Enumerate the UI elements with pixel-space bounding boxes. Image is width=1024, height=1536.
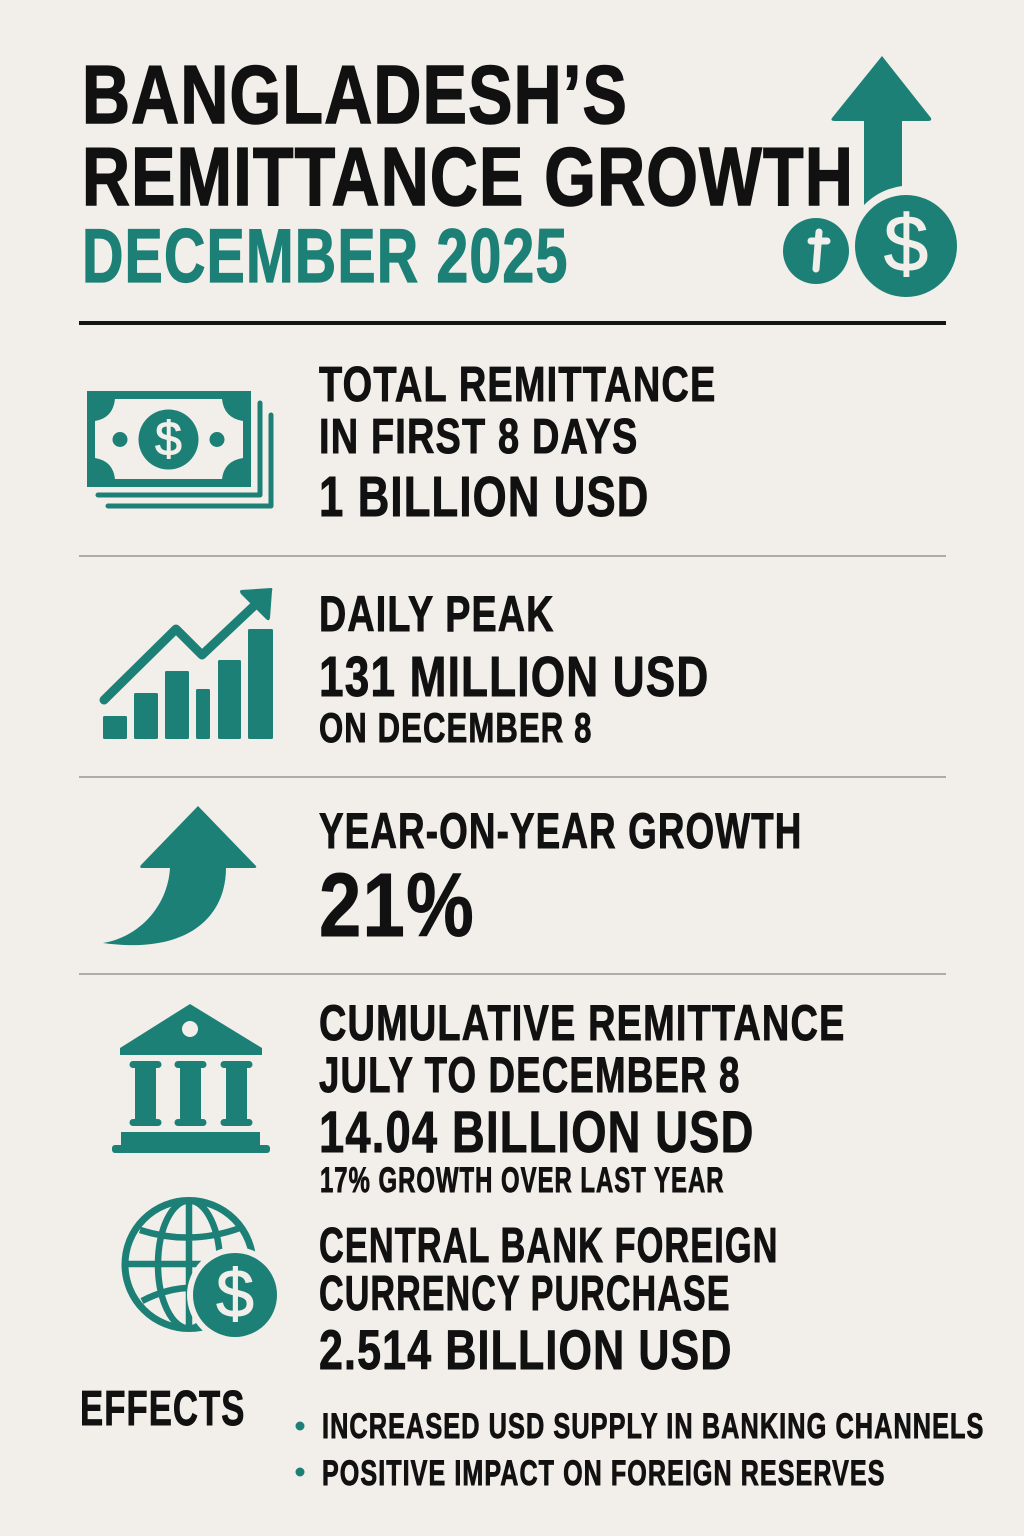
label: july to december 8: JULY TO DECEMBER 8 bbox=[319, 1047, 740, 1103]
value: 1 billion usd: 1 BILLION USD bbox=[319, 465, 650, 529]
label: currency purchase: CURRENCY PURCHASE bbox=[319, 1267, 730, 1321]
value: 14.04 billion usd: 14.04 BILLION USD bbox=[319, 1100, 754, 1165]
icon: bank bbox=[112, 1004, 270, 1153]
subtitle: date: DECEMBER 2025 bbox=[82, 214, 568, 299]
title bbox=[82, 48, 854, 299]
icon: up arrow with coins: $ bbox=[884, 199, 928, 288]
panel: effects bbox=[80, 1382, 984, 1493]
icon: bar chart with arrow bbox=[103, 588, 273, 739]
title: REMITTANCE GROWTH bbox=[82, 130, 854, 223]
panel: total remittance bbox=[87, 358, 716, 529]
title divider bbox=[79, 321, 946, 325]
panel: cumulative remittance bbox=[112, 995, 846, 1200]
value: 131 million usd: 131 MILLION USD bbox=[319, 645, 710, 709]
value: 2.514 billion usd: 2.514 BILLION USD bbox=[319, 1318, 732, 1381]
label: daily peak: DAILY PEAK bbox=[319, 586, 554, 642]
label: first 8 days: IN FIRST 8 DAYS bbox=[319, 410, 638, 464]
icon: curved up arrow bbox=[103, 806, 256, 945]
panel: central bank purchase bbox=[125, 1200, 778, 1381]
note: 17 percent growth: 17% GROWTH OVER LAST YEAR bbox=[320, 1161, 724, 1200]
icon: banknotes: $ bbox=[155, 413, 182, 466]
icon: globe with dollar coin bbox=[125, 1200, 283, 1343]
icon: banknotes bbox=[87, 391, 271, 506]
title: BANGLADESH’S bbox=[82, 48, 628, 141]
heading: effects: EFFECTS bbox=[80, 1382, 246, 1436]
label: central bank foreign: CENTRAL BANK FOREIGN bbox=[319, 1219, 778, 1273]
label: total remittance: TOTAL REMITTANCE bbox=[319, 358, 716, 412]
panel: daily peak bbox=[103, 586, 710, 751]
value: 21 percent: 21% bbox=[319, 856, 475, 956]
label: year-on-year growth: YEAR-ON-YEAR GROWTH bbox=[319, 803, 802, 859]
note: on december 8: ON DECEMBER 8 bbox=[319, 704, 592, 751]
icon: up arrow with coins bbox=[783, 56, 957, 297]
icon: globe with dollar coin: $ bbox=[216, 1256, 254, 1332]
panel: year-on-year growth bbox=[103, 803, 802, 956]
label: cumulative remittance: CUMULATIVE REMITTANCE bbox=[319, 995, 846, 1051]
